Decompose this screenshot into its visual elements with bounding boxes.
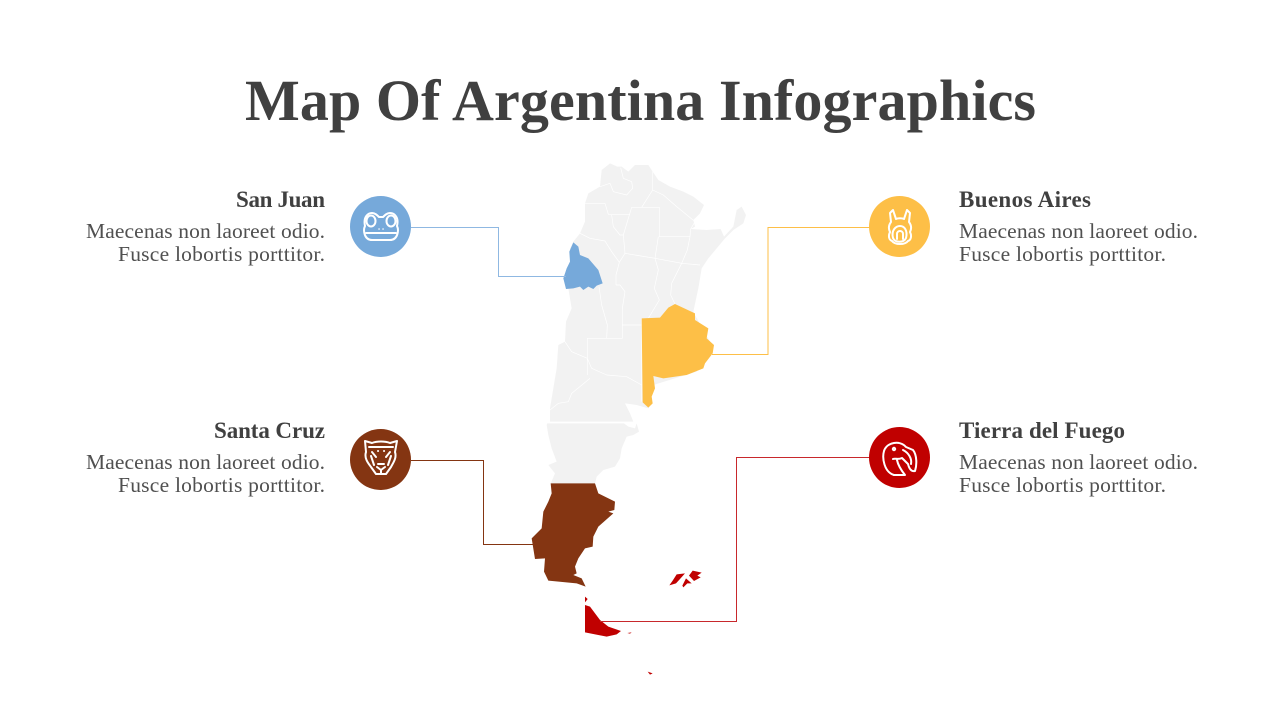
region: Chubut (547, 423, 639, 484)
text block: Tierra del Fuego (959, 418, 1198, 497)
region: Santa Cruz (532, 483, 615, 587)
text block: Buenos Aires (959, 187, 1198, 266)
icon: jaguar (350, 429, 411, 490)
text block: Tierra del Fuego: Tierra del Fuego (959, 418, 1125, 443)
connector: Santa Cruz (411, 460, 534, 544)
region: Tierra del Fuego (585, 571, 702, 675)
text block: Santa Cruz (86, 418, 325, 497)
text block: Tierra del Fuego: Maecenas non laoreet odio. (959, 450, 1198, 474)
region: Buenos Aires (642, 304, 714, 408)
text block: Buenos Aires: Buenos Aires (959, 187, 1091, 212)
text block: San Juan: San Juan (236, 187, 325, 212)
icon: llama (869, 196, 930, 257)
text block: San Juan: Maecenas non laoreet odio. (86, 219, 325, 243)
text block: Santa Cruz: Maecenas non laoreet odio. (86, 450, 325, 474)
text block: Buenos Aires: Fusce lobortis porttitor. (959, 242, 1166, 266)
text block: Santa Cruz: Santa Cruz (214, 418, 325, 443)
text block: Santa Cruz: Fusce lobortis porttitor. (118, 473, 325, 497)
text block: San Juan: Fusce lobortis porttitor. (118, 242, 325, 266)
icon: frog (350, 196, 411, 257)
text block: San Juan (86, 187, 325, 266)
connector: San Juan (411, 228, 566, 276)
region: northern and central provinces (550, 163, 746, 422)
icon: flamingo (869, 427, 930, 488)
connector: Tierra del Fuego (600, 458, 870, 622)
map of Argentina (532, 163, 746, 675)
region: San Juan (563, 242, 603, 290)
connector: Buenos Aires (712, 228, 870, 354)
title: Map Of Argentina Infographics (245, 68, 1036, 133)
text block: Buenos Aires: Maecenas non laoreet odio. (959, 219, 1198, 243)
text block: Tierra del Fuego: Fusce lobortis porttitor. (959, 473, 1166, 497)
